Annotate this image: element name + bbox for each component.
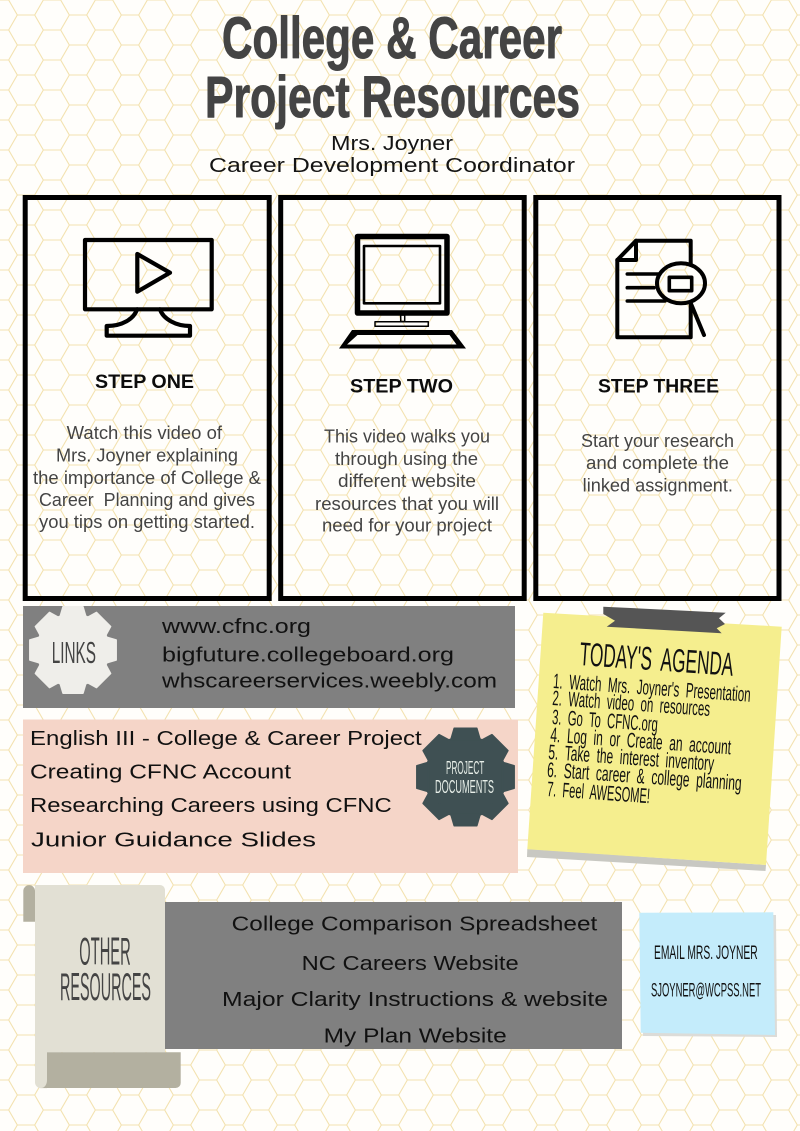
panel: step two bbox=[281, 198, 524, 598]
text: step two description: through using the bbox=[335, 449, 478, 469]
text: step two description: This video walks you bbox=[324, 427, 490, 447]
text: step one description: the importance of College & bbox=[33, 468, 261, 488]
text: document list: Creating CFNC Account bbox=[30, 760, 291, 783]
tape bbox=[603, 607, 726, 633]
label: project documents: PROJECT bbox=[446, 758, 484, 778]
text: RESOURCES bbox=[60, 966, 151, 1009]
subtitle bbox=[209, 132, 575, 177]
panel: step three bbox=[536, 198, 779, 598]
icon: desktop computer bbox=[339, 236, 466, 348]
panel: step one bbox=[25, 198, 269, 598]
text: step one description: you tips on getting started. bbox=[39, 512, 255, 532]
text: step one description: Career Planning and gives bbox=[39, 490, 255, 510]
panel: other resources links bbox=[165, 902, 622, 1049]
icon: links gear bbox=[30, 607, 116, 693]
text: document list: Researching Careers using CFNC bbox=[30, 794, 392, 817]
text: email contact bbox=[651, 943, 761, 1002]
heading: step one: STEP ONE bbox=[95, 372, 194, 393]
label: other resources bbox=[60, 930, 151, 1009]
text: agenda list: 7. Feel AWESOME! bbox=[546, 778, 651, 808]
text: link list: www.cfnc.org bbox=[161, 615, 311, 638]
text: document list: Junior Guidance Slides bbox=[31, 829, 316, 852]
heading: step three: STEP THREE bbox=[598, 377, 719, 398]
subtitle: Mrs. Joyner bbox=[331, 132, 453, 155]
text: document list bbox=[30, 727, 422, 852]
text: step two description bbox=[315, 427, 499, 536]
label: other resources: OTHER bbox=[79, 930, 131, 973]
panel: links: LINKS bbox=[52, 635, 96, 670]
label: project documents: DOCUMENTS bbox=[435, 777, 494, 797]
text: link list bbox=[161, 615, 497, 693]
scroll: other resources bbox=[23, 885, 181, 1088]
text: step three description: and complete the bbox=[586, 453, 729, 473]
text: document list: English III - College & Career Project bbox=[30, 727, 422, 750]
text: agenda list bbox=[546, 670, 751, 808]
text: link list: bigfuture.collegeboard.org bbox=[162, 644, 454, 667]
icon: project documents gear bbox=[417, 728, 514, 826]
panel: project documents bbox=[23, 720, 518, 873]
text: step one description: Watch this video of bbox=[67, 423, 223, 443]
subtitle: Career Development Coordinator bbox=[209, 154, 575, 177]
panel: other resources links: College Comparison Spreadsheet bbox=[232, 913, 598, 936]
panel: other resources links: Major Clarity Instructions & website bbox=[222, 988, 608, 1011]
label: project documents bbox=[435, 758, 494, 797]
sticky note: today's agenda bbox=[527, 607, 782, 871]
heading: step two: STEP TWO bbox=[350, 377, 453, 398]
text: step two description: different website bbox=[338, 471, 476, 491]
text: step three description bbox=[581, 431, 734, 496]
text: step three description: linked assignment. bbox=[583, 476, 733, 496]
text: step one description: Mrs. Joyner explaining bbox=[56, 446, 238, 466]
icon: video monitor bbox=[85, 240, 212, 336]
panel: other resources links: My Plan Website bbox=[324, 1024, 507, 1047]
text: step two description: need for your project bbox=[322, 516, 492, 536]
text: step one description bbox=[33, 423, 261, 532]
text: agenda list: 3. Go To CFNC.org bbox=[551, 706, 659, 736]
panel: links bbox=[23, 606, 515, 708]
title bbox=[205, 6, 580, 130]
text: step two description: resources that you will bbox=[315, 494, 499, 514]
title: Project Resources bbox=[205, 65, 580, 130]
text: link list: whscareerservices.weebly.com bbox=[161, 670, 497, 693]
text: step three description: Start your research bbox=[581, 431, 734, 451]
sticky note: email bbox=[639, 912, 777, 1037]
panel: other resources links: NC Careers Website bbox=[302, 952, 519, 975]
icon: document with magnifier bbox=[617, 241, 705, 337]
title: College & Career bbox=[222, 6, 562, 71]
